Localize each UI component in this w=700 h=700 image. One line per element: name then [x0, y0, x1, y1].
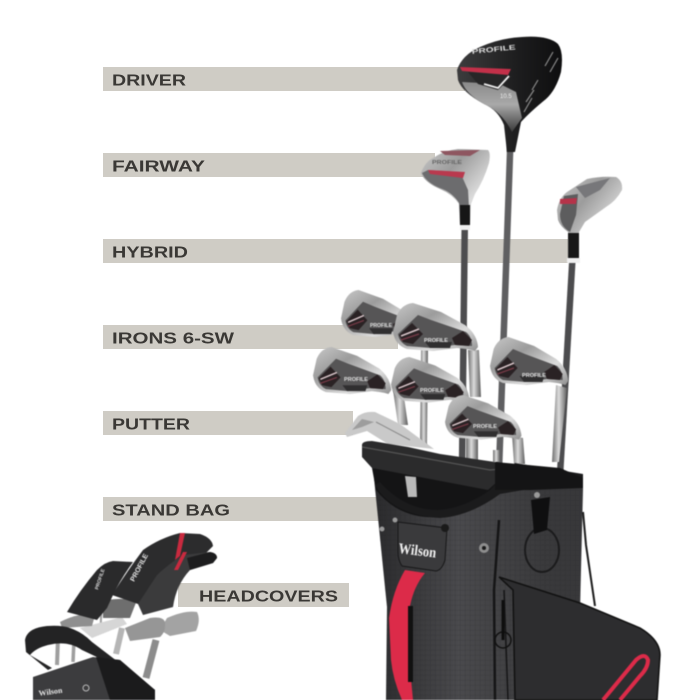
headcovers and small set inset: PROFILE: [94, 568, 107, 591]
label bar: driver: [103, 67, 465, 91]
red pocket trim: [603, 656, 648, 700]
iron head: top left: [341, 290, 416, 337]
headcover left: [67, 561, 133, 620]
small irons: [60, 599, 199, 641]
irons 6-SW: [313, 290, 568, 440]
hybrid club head: [557, 177, 622, 263]
club divider mesh: [495, 462, 583, 490]
iron head: top centre: [393, 303, 478, 351]
iron head: top left: PROFILE: [370, 323, 392, 329]
fairway club head: PROFILE: [432, 160, 462, 166]
small shafts: [57, 600, 156, 678]
iron hosels: [393, 350, 567, 464]
club shafts: [462, 125, 574, 475]
headcovers and small set inset: [25, 533, 217, 700]
iron head: centre: PROFILE: [420, 388, 444, 394]
stand bag: [362, 441, 660, 700]
label bar: driver: DRIVER: [112, 72, 187, 90]
iron head: middle left: PROFILE: [344, 377, 368, 383]
bag interior: [372, 468, 515, 517]
driver club head: PROFILE: [471, 44, 516, 56]
snaps: [380, 518, 489, 553]
wilson logo patch: [398, 522, 447, 571]
label bar: irons: [103, 325, 398, 349]
label bar: fairway: FAIRWAY: [112, 158, 205, 176]
headcovers and small set inset: PROFILE: [130, 553, 150, 583]
side pocket: [499, 577, 660, 700]
driver club head: 10.5: [500, 94, 512, 100]
iron head: right: [490, 337, 568, 385]
label bar: headcovers: [178, 583, 349, 607]
iron head: lower: PROFILE: [473, 424, 497, 430]
label bar: stand bag: [103, 497, 381, 521]
label bar: stand bag: STAND BAG: [112, 502, 230, 520]
mini bag body: [33, 657, 155, 700]
cord: [583, 512, 595, 606]
headcover right: [138, 552, 217, 615]
bag body: [374, 476, 658, 700]
label bar: headcovers: HEADCOVERS: [199, 588, 338, 606]
label bar: fairway: [103, 153, 435, 177]
mini bag logo: Wilson: [38, 686, 63, 698]
headcover middle: [112, 533, 213, 604]
iron head: top centre: PROFILE: [424, 338, 448, 344]
iron head: middle left: [313, 347, 391, 394]
top rim: [362, 441, 516, 490]
iron head: lower: [445, 395, 522, 440]
iron head: centre: [391, 357, 469, 403]
mini bag rim: [25, 626, 155, 695]
red carry handle: [389, 570, 425, 700]
ring and tab: [525, 492, 559, 572]
label bar: hybrid: HYBRID: [112, 244, 188, 262]
label bar: irons: IRONS 6-SW: [112, 330, 235, 348]
wilson logo patch: Wilson: [398, 541, 438, 562]
driver club head: [457, 37, 562, 152]
iron head: right: PROFILE: [522, 373, 546, 379]
label bar: putter: [103, 411, 353, 435]
fairway club head: [421, 149, 490, 230]
zipper seam: [494, 520, 499, 700]
putter head: [345, 412, 434, 449]
padded collar: [375, 463, 583, 518]
label bar: putter: PUTTER: [112, 416, 191, 434]
label bar: hybrid: [103, 239, 568, 263]
